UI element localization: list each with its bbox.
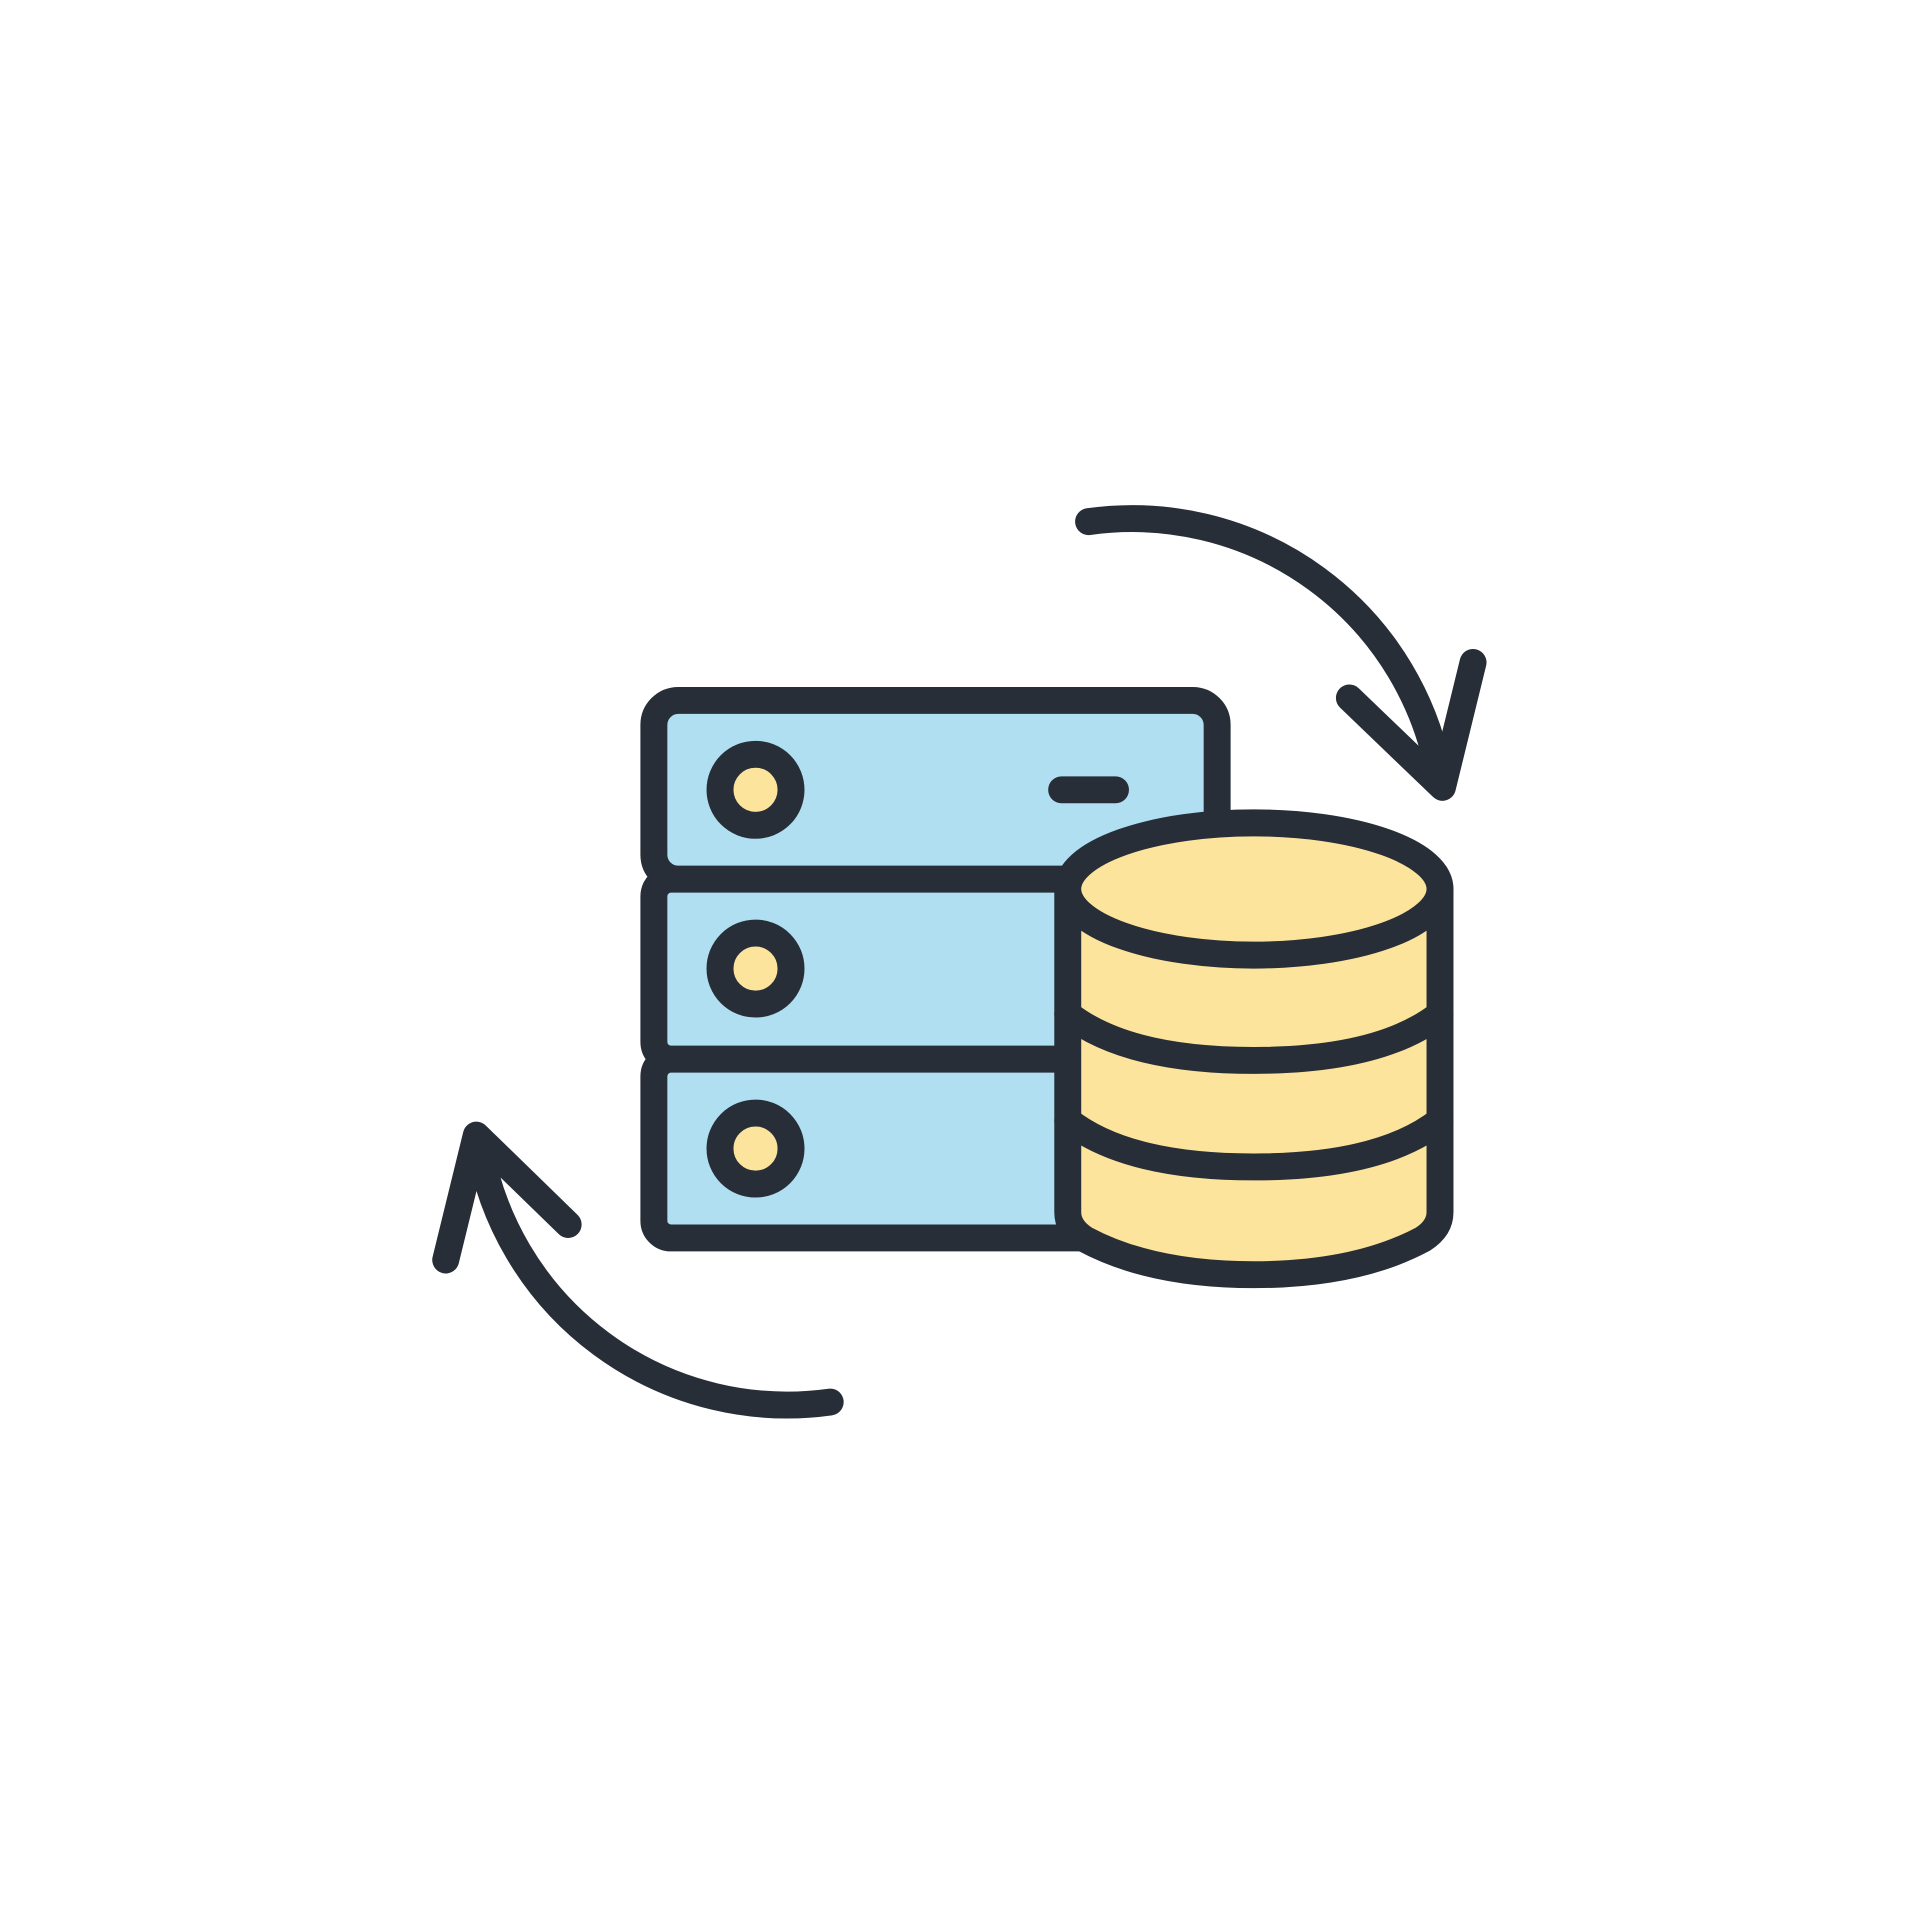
server unit top — [654, 700, 1217, 879]
arrow: bottom clockwise — [446, 1135, 830, 1405]
server unit bottom — [654, 1059, 1144, 1238]
icon: coin/database cylinder — [1068, 823, 1440, 1275]
icon: server stack — [654, 700, 1217, 1238]
arrow: top clockwise — [1089, 519, 1473, 787]
server unit middle — [654, 879, 1144, 1059]
